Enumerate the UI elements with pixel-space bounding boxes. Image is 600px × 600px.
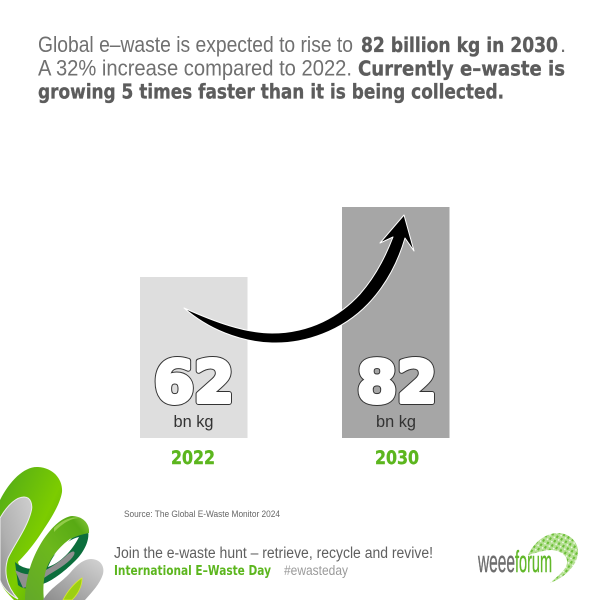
- big green band: [0, 467, 62, 600]
- source note: Source: The Global E-Waste Monitor 2024: [124, 509, 280, 519]
- logo: WEEE Forum: weee: [478, 544, 515, 579]
- logo: WEEE Forum: forum: [515, 544, 552, 579]
- value: 82 bn kg: bn kg: [376, 412, 416, 431]
- value: 82 bn kg: 82: [357, 348, 437, 416]
- hashtag: #ewasteday: [284, 563, 348, 578]
- year label: 2030: 2030: [375, 447, 419, 469]
- white opening in ring: [48, 537, 79, 567]
- value: 62 bn kg: 62: [154, 348, 234, 416]
- dark green ring: [15, 531, 88, 589]
- year label: 2022: 2022: [171, 447, 215, 469]
- campaign name: International E–Waste Day: [114, 564, 271, 579]
- heading: e-waste growth statement: Currently e–waste is: [358, 56, 565, 80]
- value: 62 bn kg: 62: [154, 348, 234, 416]
- grey lower band: [43, 559, 103, 600]
- grey inner band: [0, 497, 32, 599]
- bar: 2022: [140, 277, 248, 438]
- heading: e-waste growth statement: .: [560, 32, 566, 57]
- icon: green and grey swirl logo: [0, 467, 103, 600]
- heading: e-waste growth statement: growing 5 times faster than it is being collected.: [38, 80, 504, 104]
- value: 82 bn kg: 82: [357, 348, 437, 416]
- heading: e-waste growth statement: Global e–waste is expected to rise to: [38, 32, 353, 57]
- tagline: Join the e-waste hunt – retrieve, recycle and revive!: [114, 545, 433, 562]
- grey ring interior: [15, 552, 75, 588]
- value: 62 bn kg: bn kg: [174, 412, 214, 431]
- heading: e-waste growth statement: A 32% increase compared to 2022.: [38, 56, 352, 80]
- heading: e-waste growth statement: 82 billion kg in 2030: [361, 33, 558, 57]
- bar: 2030: [342, 207, 450, 438]
- green ring: [25, 516, 89, 600]
- lime highlight: [63, 578, 82, 600]
- heading: e-waste growth statement: [38, 32, 566, 104]
- logo: WEEE Forum: [478, 533, 578, 583]
- arrow: growth curve from 2022 to 2030: [184, 215, 414, 343]
